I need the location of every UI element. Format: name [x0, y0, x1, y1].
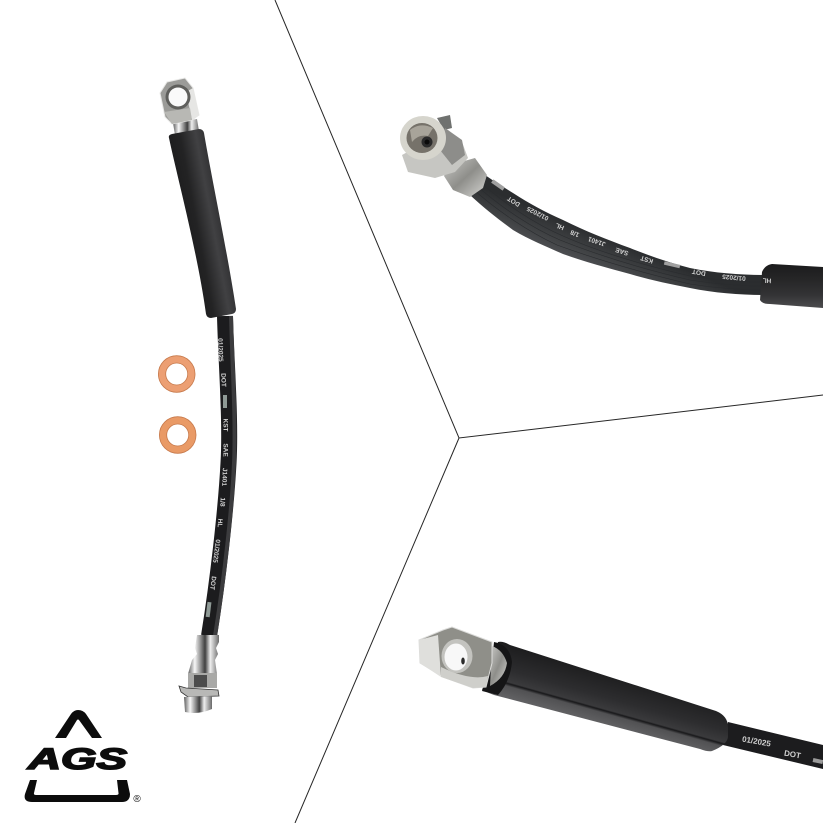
- hose markings: SAE: [614, 245, 629, 256]
- hose printed markings: HL: [216, 518, 223, 528]
- hose printed markings: [206, 338, 228, 617]
- hose markings: HL: [555, 221, 565, 231]
- hose printed markings: 1/8: [218, 497, 226, 507]
- hose ribs: [474, 182, 765, 290]
- sleeve end: [760, 264, 823, 308]
- hose markings: 1/8: [569, 228, 580, 238]
- hose printed markings: DOT: [219, 373, 227, 387]
- full brake hose with banjo fitting and sleeve: [160, 78, 236, 713]
- hose printed markings: KST: [222, 418, 228, 432]
- logo top caret: [55, 710, 102, 738]
- copper washer 1: [158, 356, 195, 392]
- hose section: [723, 722, 823, 769]
- hose markings: 01/2025: [722, 272, 746, 282]
- hose printed markings: 01/2025: [216, 338, 224, 362]
- divider lines: [275, 0, 823, 823]
- bottom fitting: [179, 635, 219, 713]
- sleeve: [482, 642, 728, 751]
- logo bottom bracket: [25, 780, 130, 802]
- hose markings: [741, 735, 823, 764]
- hose markings: DOT: [783, 749, 802, 760]
- hose printed markings: SAE: [222, 443, 228, 457]
- heat-shrink sleeve: [169, 129, 236, 318]
- fitting: [400, 115, 487, 197]
- registered mark: ®: [133, 794, 141, 805]
- hose detail: top right: [400, 115, 823, 308]
- hose printed markings: J1401: [220, 468, 228, 487]
- hose markings: DOT: [692, 267, 706, 277]
- hose markings: 01/2025: [741, 735, 772, 749]
- hose markings: J1401: [587, 235, 607, 247]
- hose printed markings: DOT: [208, 576, 217, 590]
- copper washer 2: [159, 417, 196, 453]
- hose markings: 01/2025: [526, 204, 550, 221]
- logo wordmark: AGS: [26, 743, 127, 776]
- hose markings: KST: [640, 254, 654, 264]
- hose section: [470, 175, 765, 295]
- hose detail: bottom right: [419, 627, 823, 769]
- hose markings: [491, 179, 746, 282]
- nut and neck: [419, 627, 507, 688]
- AGS logo: [25, 710, 141, 805]
- hose body: [209, 316, 235, 636]
- banjo fitting: [160, 78, 199, 135]
- sleeve end ring: [482, 642, 512, 695]
- hose markings: DOT: [506, 194, 522, 208]
- hose printed markings: 01/2025: [211, 539, 221, 563]
- sleeve edge label: HL: [762, 276, 772, 284]
